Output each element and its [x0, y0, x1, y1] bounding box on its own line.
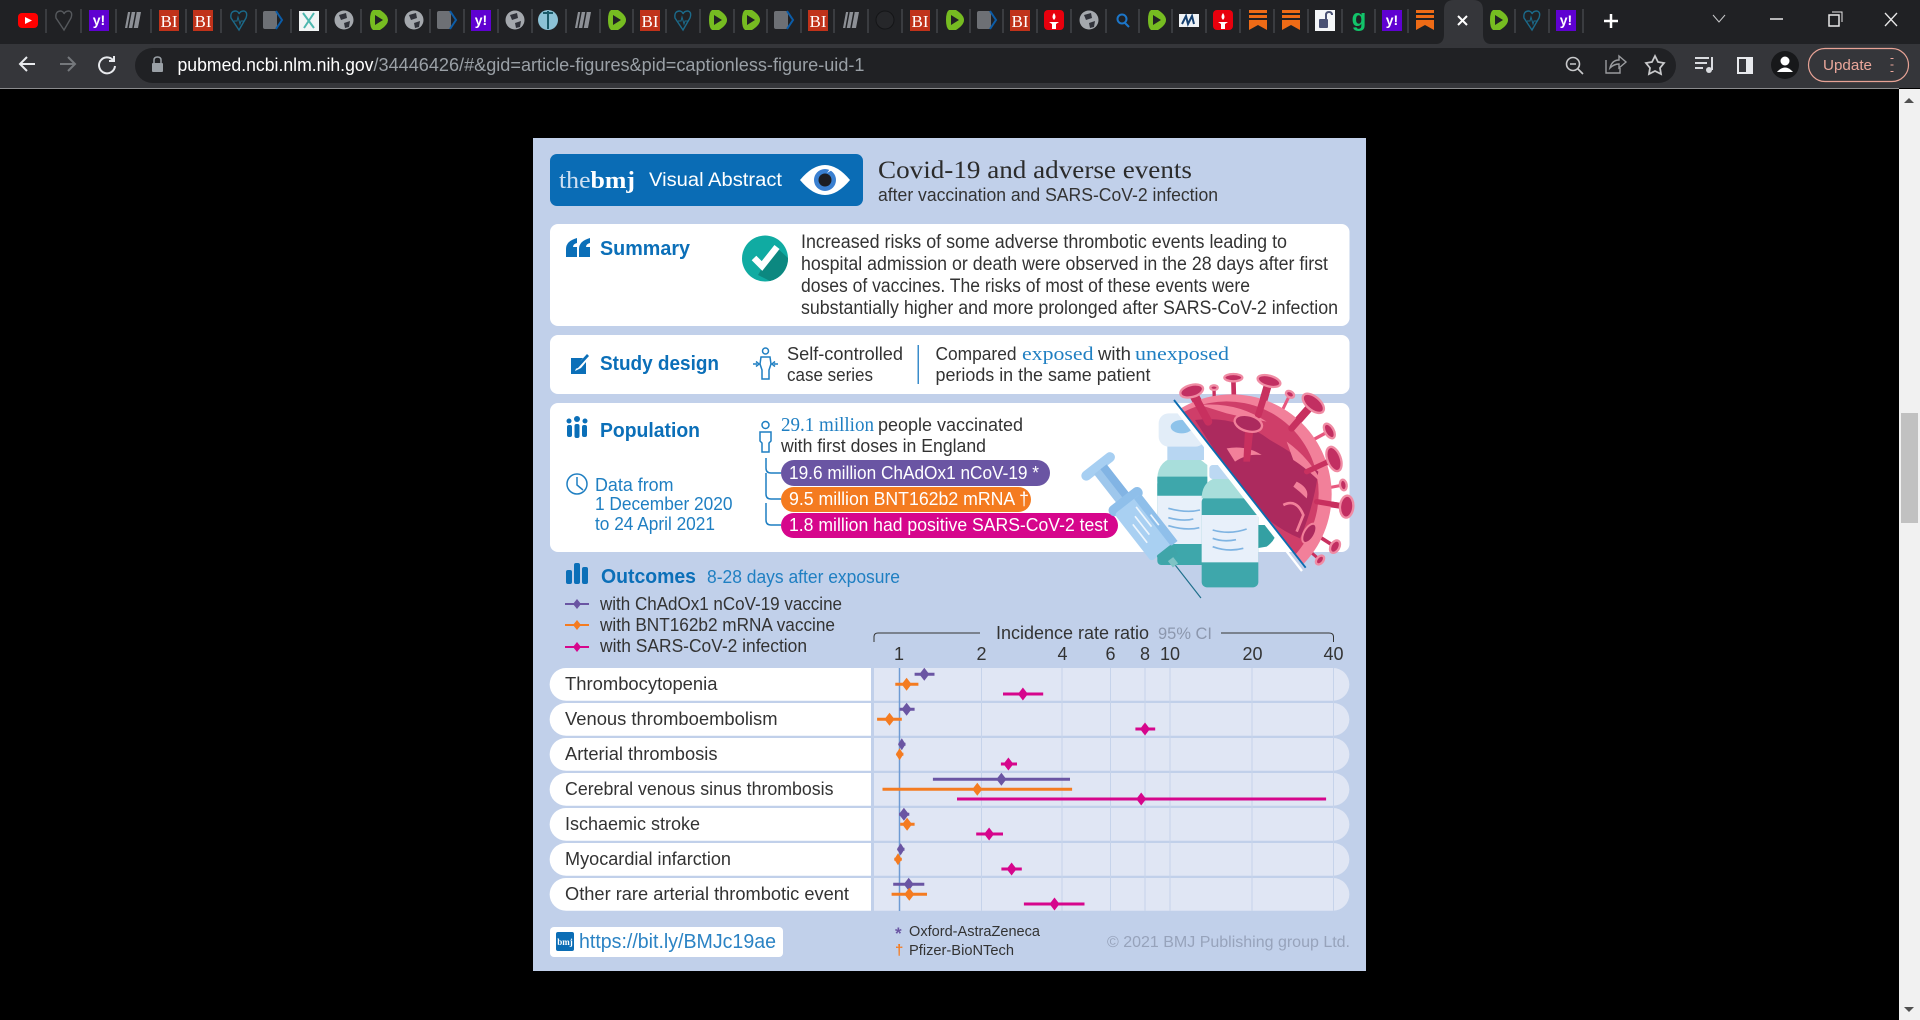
legend: with BNT162b2 mRNA vaccine [599, 615, 835, 635]
axis tick labels: 4 [1057, 644, 1068, 664]
heading: outcomes: 8-28 days after exposure [707, 567, 900, 587]
footnotes: † [895, 942, 903, 959]
icon: bmj logo [556, 932, 574, 951]
data period text: 1 December 2020 [595, 494, 732, 514]
browser tab strip: g [1352, 5, 1366, 32]
study type text: case series [787, 365, 873, 385]
browser tab strip: BI [810, 12, 827, 31]
surface spikes [1233, 412, 1319, 545]
copyright: © 2021 BMJ Publishing group Ltd. [1107, 934, 1350, 951]
title [878, 157, 1218, 205]
comparison text: Compared [936, 344, 1016, 364]
data period text: to 24 April 2021 [595, 514, 715, 534]
vials [1157, 413, 1277, 587]
browser tab strip [0, 0, 1920, 44]
outcome row labels [565, 674, 849, 904]
panel: population [550, 403, 1350, 552]
heading: study design: Study design [600, 353, 719, 375]
page scrollbar [1899, 89, 1920, 1020]
axis tick labels: 6 [1105, 644, 1116, 664]
title: Covid-19 and adverse events [878, 157, 1192, 184]
address bar URL: /34446426/#&gid=article-figures&pid=captionless-figure-uid-1 [374, 55, 864, 75]
header badge: thebmj Visual Abstract [550, 154, 863, 206]
heading: population: Population [600, 420, 700, 442]
diagonal divider line [1172, 400, 1306, 571]
summary text: hospital admission or death were observed in the 28 days after first [801, 254, 1329, 275]
browser tab strip: BI [194, 12, 212, 31]
outcome row labels: Venous thromboembolism [565, 709, 778, 729]
panel: study design [550, 335, 1350, 394]
legend: with ChAdOx1 nCoV-19 vaccine [599, 594, 842, 614]
icon: quote marks [566, 238, 590, 257]
outcome row labels: Thrombocytopenia [565, 674, 718, 694]
comparison text: exposed [1022, 344, 1094, 365]
population total text [780, 414, 1023, 456]
link box: https://bit.ly/BMJc19ae [579, 931, 776, 953]
icon: bmj logo: bmj [557, 937, 573, 947]
icon: people [566, 416, 588, 438]
study type text: Self-controlled [787, 344, 903, 364]
icon: check mark [742, 236, 788, 282]
virus half [1179, 372, 1354, 566]
browser tab strip: BI [642, 12, 659, 31]
syringe [1079, 450, 1217, 610]
chart: confidence intervals, ChAdOx1 vaccine [893, 668, 1070, 891]
address bar URL: pubmed.ncbi.nlm.nih.gov [178, 55, 374, 75]
illustration: syringe, vials and virus [1079, 373, 1354, 610]
pill: SARS-CoV-2: 1.8 million had positive SARS-CoV-2 test [789, 515, 1108, 535]
outcome rows background [550, 668, 1349, 911]
outcome row labels: Other rare arterial thrombotic event [565, 884, 849, 904]
heading: outcomes: Outcomes [601, 566, 696, 588]
legend [565, 594, 842, 656]
summary text: substantially higher and more prolonged after SARS-CoV-2 infection [801, 298, 1338, 319]
browser tab strip: y! [475, 12, 487, 28]
population total text: with first doses in England [780, 436, 986, 456]
chart: confidence intervals, SARS-CoV-2 infection [957, 688, 1326, 910]
comparison text [936, 344, 1230, 385]
infographic background panel [533, 138, 1366, 971]
study type text [787, 344, 903, 385]
comparison text: unexposed [1135, 344, 1230, 365]
axis title: incidence rate ratio: Incidence rate ratio [996, 623, 1149, 643]
population total text: people vaccinated [878, 415, 1023, 435]
icon: person [760, 422, 771, 452]
legend: with SARS-CoV-2 infection [599, 636, 807, 656]
link box [550, 927, 783, 957]
axis tick labels: 10 [1160, 644, 1180, 664]
icon: clock [567, 474, 587, 494]
icon: person with arrows [753, 348, 778, 379]
footnotes: Oxford-AstraZeneca [909, 923, 1041, 940]
bracket connecting pills [766, 458, 781, 525]
panel: summary [550, 224, 1350, 326]
title: after vaccination and SARS-CoV-2 infection [878, 185, 1218, 205]
icon: bar chart [566, 563, 588, 584]
header badge: thebmj Visual Abstract: thebmj [559, 168, 635, 194]
data period text [595, 475, 732, 534]
axis tick labels: 20 [1242, 644, 1263, 664]
footnotes: Pfizer-BioNTech [909, 942, 1014, 959]
axis title: incidence rate ratio: 95% CI [1158, 624, 1212, 643]
footnotes [895, 923, 1041, 959]
browser tab strip: BI [912, 12, 929, 31]
icon: eye [800, 165, 850, 195]
summary text: Increased risks of some adverse thrombotic events leading to [801, 232, 1287, 253]
chart: confidence intervals, BNT162b2 vaccine [877, 678, 1072, 901]
axis tick labels: 2 [976, 644, 987, 664]
header badge: thebmj Visual Abstract: Visual Abstract [649, 170, 783, 191]
outcome row labels: Arterial thrombosis [565, 744, 718, 764]
browser tab strip: y! [1386, 12, 1398, 28]
browser toolbar: Update [1823, 57, 1872, 74]
summary text [801, 232, 1338, 319]
population total text: 29.1 million [781, 414, 874, 436]
heading: outcomes [566, 563, 900, 588]
outcome row labels: Myocardial infarction [565, 849, 731, 869]
pill: ChAdOx1: 19.6 million ChAdOx1 nCoV-19 * [789, 463, 1039, 483]
axis tick labels: 40 [1323, 644, 1344, 664]
axis tick labels [894, 644, 1344, 664]
browser tab strip: BI [1012, 12, 1029, 31]
browser tab strip: y! [93, 12, 105, 28]
axis title: incidence rate ratio [874, 623, 1334, 643]
pill: BNT162b2: 9.5 million BNT162b2 mRNA † [789, 489, 1029, 509]
browser toolbar [0, 44, 1920, 89]
data period text: Data from [595, 475, 674, 495]
outcome row labels: Cerebral venous sinus thrombosis [565, 779, 834, 799]
icon: pencil on note [571, 354, 589, 374]
axis tick labels: 8 [1140, 644, 1150, 664]
outcome row labels: Ischaemic stroke [565, 814, 700, 834]
comparison text: with [1097, 344, 1131, 364]
summary text: doses of vaccines. The risks of most of these events were [801, 276, 1250, 297]
browser tab strip: y! [1560, 12, 1572, 28]
heading: summary: Summary [600, 238, 691, 260]
comparison text: periods in the same patient [936, 365, 1150, 385]
footnotes: * [895, 924, 902, 943]
browser tab strip: BI [160, 12, 178, 31]
axis tick labels: 1 [894, 644, 904, 664]
